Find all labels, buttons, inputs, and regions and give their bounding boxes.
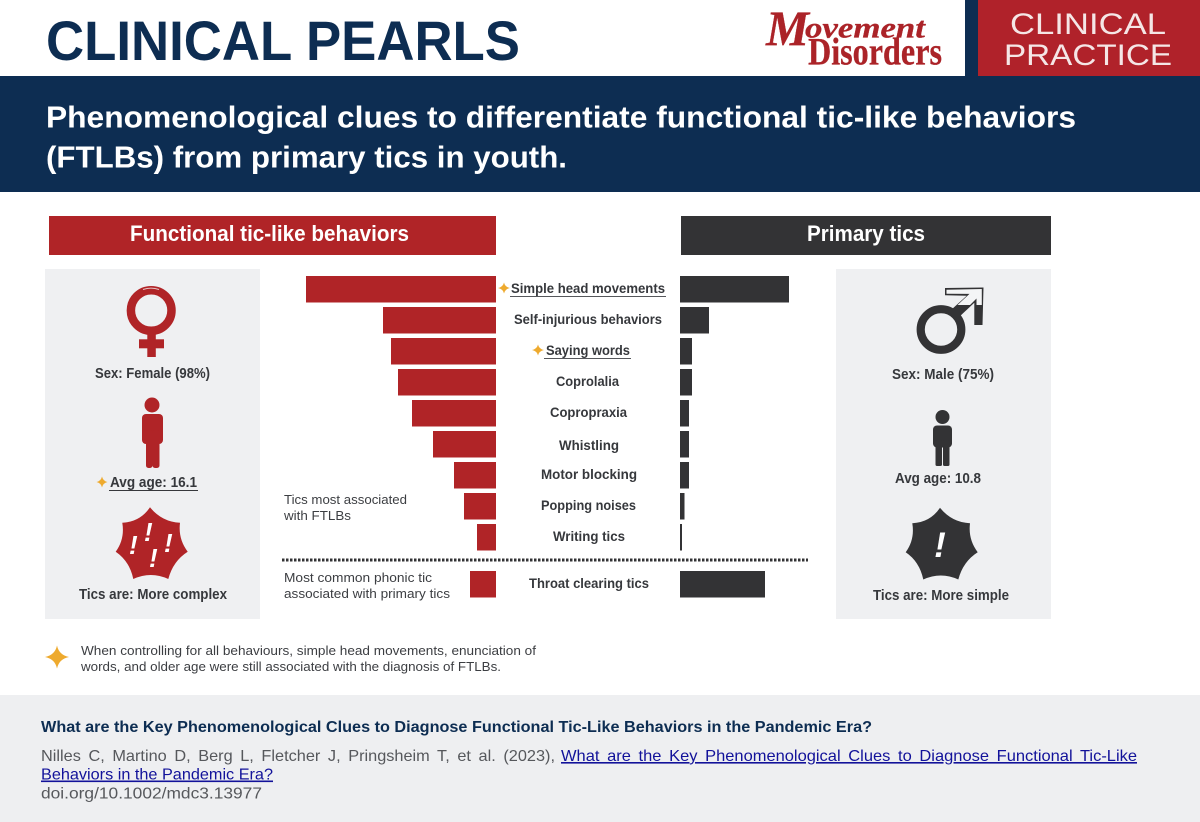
chart labels: Simple head movements [511, 280, 665, 296]
chart labels: Whistling [559, 437, 619, 453]
chart labels: Copropraxia [550, 404, 627, 420]
average age: 16.1: Avg age: 16.1 [110, 474, 197, 491]
annotation: most common phonic tic: associated with primary tics [284, 586, 451, 601]
logo: Movement Disorders: M [765, 0, 810, 56]
sex: female: Sex: Female (98%) [95, 365, 210, 382]
chart labels: Self-injurious behaviors [514, 311, 662, 327]
annotation: most common phonic tic [284, 570, 451, 601]
citation link: What are the Key Phenomenological Clues to Diagnose Functional Tic-Like [561, 748, 1137, 765]
chart labels: Writing tics [553, 528, 625, 544]
chart labels: Throat clearing tics [529, 575, 649, 591]
panel: FTLB demographics [45, 269, 260, 619]
icon: burst with one exclamation mark [906, 508, 978, 580]
citation link: Behaviors in the Pandemic Era? [41, 766, 273, 784]
icon: burst with many exclamation marks: ! [129, 530, 138, 560]
complexity: more simple: Tics are: More simple [873, 587, 1009, 604]
logo: Movement Disorders: Disorders [808, 30, 942, 74]
chart labels: Motor blocking [541, 466, 637, 482]
heading: Primary tics: Primary tics [807, 221, 925, 246]
icon: burst with many exclamation marks: ! [164, 528, 173, 558]
logo: Clinical Practice: CLINICAL [1010, 8, 1166, 41]
icon: female symbol [131, 288, 172, 357]
icon: burst with many exclamation marks [116, 507, 188, 579]
heading: Primary tics [681, 216, 1051, 255]
annotation: most common phonic tic: Most common phonic tic [284, 570, 433, 585]
citation authors: Nilles C, Martino D, Berg L, Fletcher J, Pringsheim T, et al. (2023), [41, 748, 555, 765]
chart: FTLB bars [306, 276, 496, 598]
panel: citation footer [0, 695, 1200, 822]
icon: burst with many exclamation marks: ! [149, 543, 158, 573]
star: average age [96, 476, 108, 488]
chart labels: Saying words [546, 342, 630, 358]
footnote [80, 643, 536, 674]
complexity: more complex: Tics are: More complex [79, 586, 228, 603]
icon: burst with one exclamation mark: ! [934, 526, 946, 565]
icon: young adult figure [142, 398, 163, 468]
logo: Movement Disorders [765, 0, 942, 74]
logo: Clinical Practice: PRACTICE [1004, 39, 1172, 72]
subtitle banner [0, 76, 1200, 192]
logo: Clinical Practice [965, 0, 1200, 77]
icon: child figure [933, 410, 952, 466]
annotation: tics most associated with FTLBs: with FTLBs [283, 508, 352, 523]
footnote: words, and older age were still associated with the diagnosis of FTLBs. [80, 659, 501, 674]
annotation: tics most associated with FTLBs [283, 492, 407, 523]
footnote: When controlling for all behaviours, simple head movements, enunciation of [81, 643, 536, 658]
subtitle banner: (FTLBs) from primary tics in youth. [46, 140, 567, 174]
chart labels [498, 280, 666, 591]
title: CLINICAL PEARLS [46, 9, 520, 72]
icon: gold star [45, 646, 69, 668]
icon: male symbol [921, 288, 984, 350]
logo: Movement Disorders: ovement [805, 12, 927, 44]
subtitle banner: Phenomenological clues to differentiate functional tic-like behaviors [46, 100, 1076, 134]
average age: 10.8: Avg age: 10.8 [895, 470, 981, 487]
annotation: tics most associated with FTLBs: Tics most associated [284, 492, 407, 507]
heading: Functional tic-like behaviors: Functional tic-like behaviors [130, 221, 409, 246]
citation link [41, 748, 1137, 784]
citation heading: What are the Key Phenomenological Clues to Diagnose Functional Tic-Like Behaviors in the Pandemic Era? [41, 719, 872, 736]
chart: primary tic bars [680, 276, 789, 598]
icon: burst with many exclamation marks: ! [144, 517, 153, 547]
panel: primary tic demographics [836, 269, 1051, 619]
sex: male: Sex: Male (75%) [892, 366, 994, 383]
heading: Functional tic-like behaviors [49, 216, 496, 255]
chart labels: Coprolalia [556, 373, 619, 389]
chart labels: Popping noises [541, 497, 636, 513]
citation DOI: doi.org/10.1002/mdc3.13977 [41, 786, 262, 802]
